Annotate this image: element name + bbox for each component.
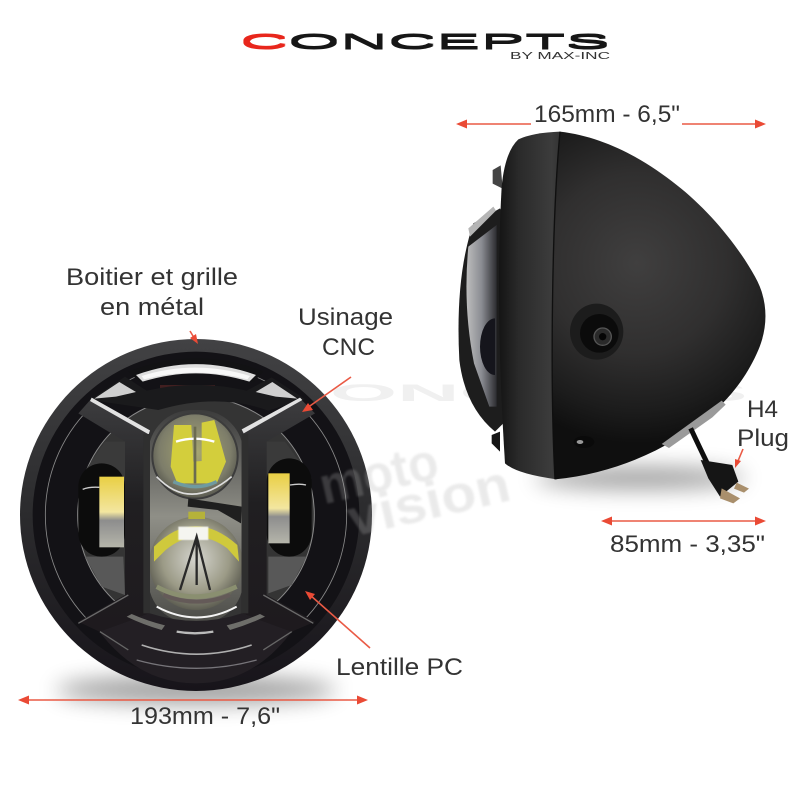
arrow: PC lens xyxy=(305,591,370,648)
grille xyxy=(78,398,315,632)
arrow: metal casing xyxy=(190,331,198,344)
mount bolt xyxy=(570,304,623,360)
lower bezel xyxy=(78,595,313,683)
headlight side view xyxy=(459,132,765,503)
arrow: 165mm width xyxy=(456,120,766,128)
label: PC lens: Lentille PC xyxy=(336,654,463,681)
side lights xyxy=(78,442,312,595)
label: 85mm: 85mm - 3,35" xyxy=(610,531,765,558)
labels xyxy=(66,101,789,730)
watermark: Concepts: ONCEPTS xyxy=(330,380,748,406)
bracket xyxy=(662,401,726,448)
headlight front view xyxy=(20,339,372,691)
outer metal ring xyxy=(20,339,372,691)
lower lens xyxy=(149,498,243,617)
upper lens xyxy=(152,413,238,499)
side shadow xyxy=(535,467,745,489)
logo: CONCEPTS by Max-Inc: BY MAX-INC xyxy=(510,51,610,62)
small screw xyxy=(574,436,594,448)
shell xyxy=(552,132,765,479)
logo: CONCEPTS by Max-Inc: CONCEPTS xyxy=(240,31,610,53)
arrow: H4 plug xyxy=(735,449,743,468)
label: CNC: Usinage xyxy=(298,304,393,331)
label: metal casing: en métal xyxy=(100,294,204,321)
lens side xyxy=(459,165,507,452)
watermark: Moto Vision: moto xyxy=(314,433,444,516)
arrows xyxy=(18,120,766,704)
arrow: 85mm depth xyxy=(601,516,766,526)
centre reflector xyxy=(148,410,243,623)
front shadow xyxy=(56,676,336,704)
front bezel xyxy=(499,132,565,479)
watermark: Moto Vision xyxy=(314,418,516,553)
arrow: CNC xyxy=(302,377,351,412)
label: H4 plug: H4 xyxy=(747,396,778,423)
label: H4 plug xyxy=(737,396,789,452)
label: H4 plug: Plug xyxy=(737,425,789,452)
label: CNC xyxy=(298,304,393,361)
top light strip xyxy=(90,358,305,411)
watermark: Moto Vision: vision xyxy=(342,455,516,549)
label: metal casing xyxy=(66,264,238,321)
label: 193mm: 193mm - 7,6" xyxy=(130,703,280,730)
plug cable xyxy=(691,428,749,503)
dark lens xyxy=(45,364,347,666)
label: 165mm: 165mm - 6,5" xyxy=(534,101,680,128)
label: metal casing: Boitier et grille xyxy=(66,264,238,291)
ghost logo reflection xyxy=(160,385,215,401)
arrow: 193mm diameter xyxy=(18,696,368,704)
label: CNC: CNC xyxy=(322,334,375,361)
